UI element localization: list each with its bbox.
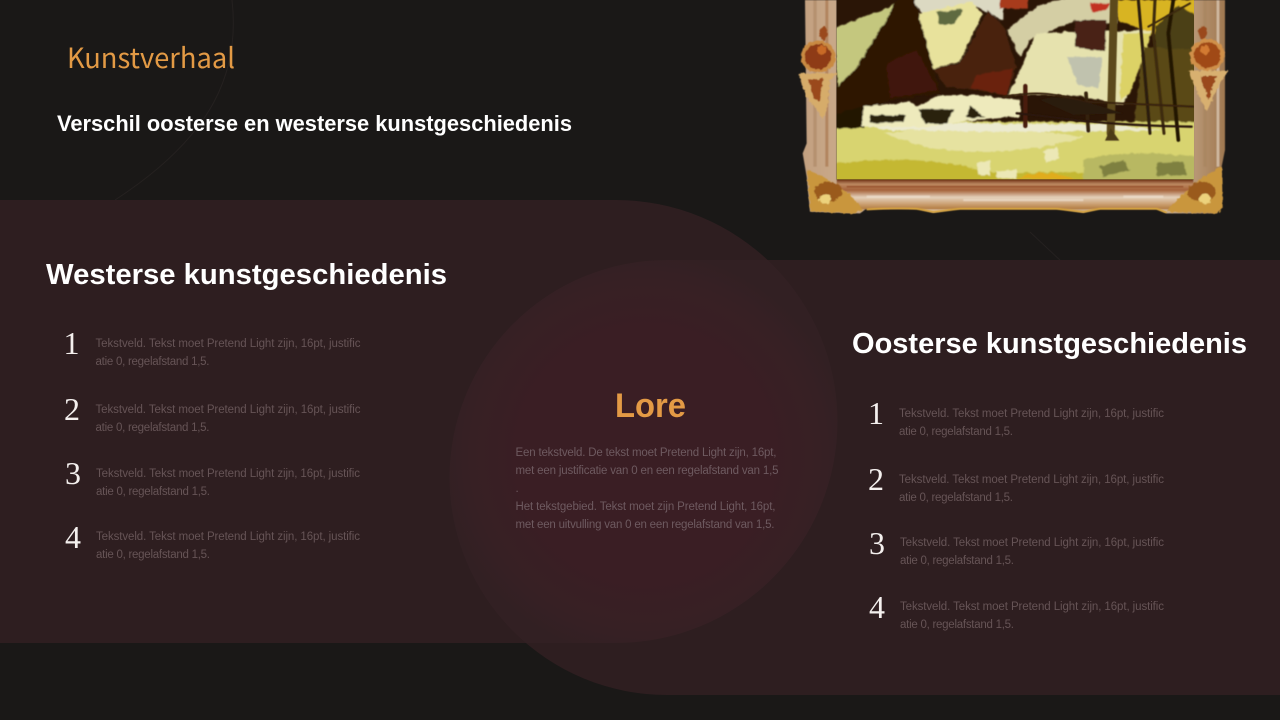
icon: framed painting xyxy=(798,0,1228,213)
panel: lore xyxy=(516,387,778,531)
list item 3: atie 0, regelafstand 1,5. xyxy=(900,555,1014,567)
heading: westers: Westerse kunstgeschiedenis xyxy=(46,259,447,291)
painting canvas xyxy=(833,0,1200,183)
lore text: . xyxy=(516,483,519,495)
list item 2: 2 xyxy=(868,461,884,497)
list item 4: atie 0, regelafstand 1,5. xyxy=(96,549,210,561)
title: Kunstverhaal xyxy=(67,37,235,77)
decorative thin arc xyxy=(115,0,1185,301)
heading: lore: Lore xyxy=(615,387,686,425)
lore text: Een tekstveld. De tekst moet Pretend Light zijn, 16pt, xyxy=(516,447,776,459)
list item 3: atie 0, regelafstand 1,5. xyxy=(96,486,210,498)
list item 2 xyxy=(64,391,361,434)
heading: oosters: Oosterse kunstgeschiedenis xyxy=(852,328,1247,360)
list item 3: 3 xyxy=(869,525,885,561)
panel: oosterse kunstgeschiedenis xyxy=(852,328,1247,631)
panel: westerse kunstgeschiedenis xyxy=(46,259,447,561)
list item 4 xyxy=(869,589,1164,631)
list item 1 xyxy=(868,395,1164,438)
list item 4: Tekstveld. Tekst moet Pretend Light zijn, 16pt, justific xyxy=(96,531,360,543)
subtitle: Verschil oosterse en westerse kunstgeschiedenis xyxy=(57,111,572,136)
list item 3: 3 xyxy=(65,455,81,491)
list item 1: atie 0, regelafstand 1,5. xyxy=(96,356,210,368)
list item 4: 4 xyxy=(869,589,885,625)
list item 3: Tekstveld. Tekst moet Pretend Light zijn, 16pt, justific xyxy=(900,537,1164,549)
list item 2 xyxy=(868,461,1164,504)
frame xyxy=(803,0,1225,213)
list item 4: Tekstveld. Tekst moet Pretend Light zijn, 16pt, justific xyxy=(900,601,1164,613)
lore text: Het tekstgebied. Tekst moet zijn Pretend Light, 16pt, xyxy=(516,501,776,513)
list item 1: 1 xyxy=(64,325,80,361)
list item 2: atie 0, regelafstand 1,5. xyxy=(899,492,1013,504)
list item 4 xyxy=(65,519,360,561)
list item 1: 1 xyxy=(868,395,884,431)
panel: oosterse background xyxy=(450,260,1280,695)
lore text xyxy=(516,447,778,531)
list item 1: Tekstveld. Tekst moet Pretend Light zijn, 16pt, justific xyxy=(899,408,1164,420)
list item 4: 4 xyxy=(65,519,81,555)
list item 1: Tekstveld. Tekst moet Pretend Light zijn, 16pt, justific xyxy=(96,338,361,350)
list item 3: Tekstveld. Tekst moet Pretend Light zijn, 16pt, justific xyxy=(96,468,360,480)
list item 2: Tekstveld. Tekst moet Pretend Light zijn, 16pt, justific xyxy=(96,404,361,416)
lore text: met een justificatie van 0 en een regelafstand van 1,5 xyxy=(516,465,778,477)
list item 2: 2 xyxy=(64,391,80,427)
ornaments xyxy=(798,26,1228,213)
list item 2: atie 0, regelafstand 1,5. xyxy=(96,422,210,434)
panel: lore overlap xyxy=(464,275,825,634)
list item 1 xyxy=(64,325,361,368)
list item 3 xyxy=(869,525,1164,567)
list item 4: atie 0, regelafstand 1,5. xyxy=(900,619,1014,631)
list item 2: Tekstveld. Tekst moet Pretend Light zijn, 16pt, justific xyxy=(899,474,1164,486)
list item 1: atie 0, regelafstand 1,5. xyxy=(899,426,1013,438)
list item 3 xyxy=(65,455,360,498)
lore text: met een uitvulling van 0 en een regelafstand van 1,5. xyxy=(516,519,774,531)
panel: westerse background xyxy=(0,200,838,643)
frame edge scrollwork xyxy=(867,208,1167,213)
